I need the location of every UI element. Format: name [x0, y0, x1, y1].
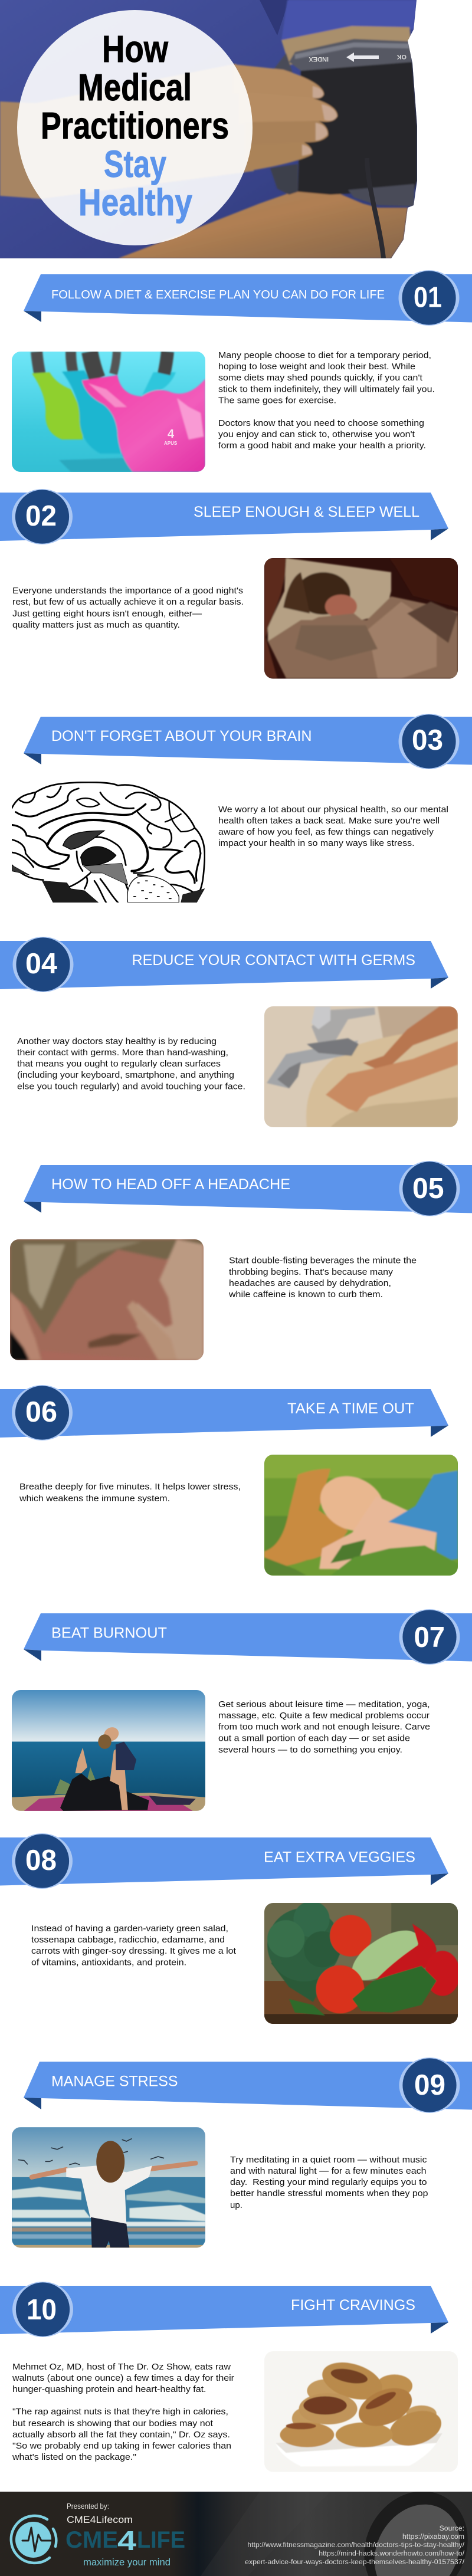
banner 10: [0, 2282, 448, 2337]
text: tip 9: and with natural light — for a few minutes each: [230, 2167, 426, 2176]
text: tip 8: carrots with ginger-soy dressing. It gives me a lot: [31, 1947, 236, 1956]
text: tip 6: Breathe deeply for five minutes. It helps lower stress,: [19, 1482, 241, 1492]
text: tip 5: Start double-fisting beverages the minute the: [229, 1256, 417, 1266]
text: tip 9: day. Resting your mind regularly equips you to: [230, 2178, 427, 2187]
banner 01: [24, 270, 472, 326]
text: tip 2: quality matters just as much as quantity.: [12, 621, 180, 630]
text: tip 9: Try meditating in a quiet room — without music: [230, 2155, 427, 2165]
banner 04: 04: [25, 948, 57, 980]
text: tip 10: Mehmet Oz, MD, host of The Dr. Oz Show, eats raw: [12, 2362, 231, 2372]
presenter name: CME4Lifecom: [67, 2514, 133, 2525]
title text: [41, 28, 229, 224]
hero photo: blood pressure cuff: [0, 0, 419, 260]
text: tip 10: [12, 2362, 234, 2462]
banner 06: TAKE A TIME OUT: [287, 1400, 414, 1417]
sources: [245, 2524, 465, 2566]
text: tip 6: [19, 1482, 241, 1504]
text: tip 3: aware of how you feel, as few things can negatively: [218, 828, 434, 837]
text: tip 2: [12, 586, 244, 630]
illustration: brain: [12, 782, 205, 903]
photo: pecans on plate: [264, 2351, 458, 2472]
text: tip 2: Just getting eight hours isn't enough, either—: [12, 609, 202, 619]
logo wordmark: LIFE: [137, 2527, 185, 2553]
text: tip 6: which weakens the immune system.: [19, 1494, 170, 1504]
text: tip 7: massage, etc. Quite a few medical problems occur: [218, 1711, 430, 1721]
text: tip 1: form a good habit and make your health a priority.: [218, 441, 426, 451]
text: tip 4: Another way doctors stay healthy is by reducing: [17, 1037, 217, 1046]
title circle: [17, 10, 253, 245]
text: tip 5: headaches are caused by dehydration,: [229, 1279, 391, 1288]
hero photo: blood pressure cuff: INDEX: [309, 55, 329, 63]
text: tip 8: of vitamins, antioxidants, and protein.: [31, 1958, 186, 1968]
text: tip 10: "The rap against nuts is that they're high in calories,: [12, 2407, 228, 2417]
logo wordmark: [65, 2525, 185, 2556]
sources: expert-advice-four-ways-doctors-keep-themselves-healthy-0157537/: [245, 2558, 465, 2566]
text: tip 1: Many people choose to diet for a temporary period,: [218, 351, 431, 360]
text: tip 3: impact your health in so many ways like stress.: [218, 839, 414, 848]
text: tip 10: hunger-quashing protein and heart-healthy fat.: [12, 2385, 206, 2394]
text: tip 7: [218, 1700, 430, 1755]
text: tip 1: stick to them indefinitely, they will ultimately fail you.: [218, 385, 435, 394]
banner 10: 10: [27, 2294, 57, 2326]
text: tip 9: up.: [230, 2201, 242, 2210]
photo: kettlebells: [12, 352, 205, 472]
banner 06: [0, 1385, 448, 1440]
banner 01: 01: [414, 282, 442, 314]
text: tip 10: but research is showing that our bodies may not: [12, 2419, 213, 2429]
presented by: Presented by:: [67, 2502, 109, 2511]
text: tip 7: several hours — to do something you enjoy.: [218, 1745, 402, 1755]
banner 08: 08: [25, 1845, 57, 1876]
banner 10: FIGHT CRAVINGS: [291, 2297, 415, 2314]
banner 02: 02: [25, 500, 57, 532]
banner 07: BEAT BURNOUT: [51, 1625, 167, 1641]
sources: http://www.fitnessmagazine.com/health/doctors-tips-to-stay-healthy/: [247, 2541, 465, 2549]
logo wordmark: 4: [117, 2525, 137, 2556]
text: tip 10: what's listed on the package.": [12, 2453, 136, 2462]
banner 03: DON'T FORGET ABOUT YOUR BRAIN: [51, 728, 312, 744]
photo: kettlebells: 4: [168, 428, 175, 441]
banner 07: 07: [414, 1622, 445, 1653]
text: tip 4: [17, 1037, 245, 1091]
text: tip 5: throbbing begins. That's because many: [229, 1268, 394, 1277]
logo wordmark: CME: [65, 2527, 118, 2553]
text: tip 8: Instead of having a garden-variety green salad,: [31, 1924, 228, 1934]
banner 02: SLEEP ENOUGH & SLEEP WELL: [194, 504, 419, 520]
text: tip 1: Doctors know that you need to choose something: [218, 419, 424, 428]
banner 03: 03: [412, 724, 443, 756]
text: tip 4: (including your keyboard, smartphone, and anything: [17, 1071, 234, 1080]
text: tip 8: [31, 1924, 236, 1968]
photo: woman on beach: [12, 2127, 205, 2248]
text: tip 10: walnuts (about one ounce) a few times a day for their: [12, 2374, 234, 2383]
sources: https://pixabay.com: [402, 2532, 464, 2541]
photo: yoga by the sea: [12, 1690, 205, 1811]
sources: Source:: [440, 2524, 464, 2532]
title text: Practitioners: [41, 104, 229, 147]
title text: Medical: [78, 66, 192, 109]
footer: [0, 2492, 472, 2576]
text: tip 7: Get serious about leisure time — meditation, yoga,: [218, 1700, 430, 1709]
text: tip 10: "So we probably end up taking in fewer calories than: [12, 2442, 231, 2451]
text: tip 1: [218, 351, 435, 451]
text: tip 2: Everyone understands the importance of a good night's: [12, 586, 243, 596]
banner 08: [0, 1833, 448, 1889]
text: tip 1: you enjoy and can stick to, otherwise you won't: [218, 430, 415, 439]
sources: https://mind-hacks.wonderhowto.com/how-to/: [319, 2549, 465, 2558]
banner 04: REDUCE YOUR CONTACT WITH GERMS: [132, 952, 415, 969]
banner 09: 09: [414, 2069, 445, 2101]
footer photo: stethoscope: [201, 2492, 467, 2576]
text: tip 3: [218, 805, 448, 848]
text: tip 3: health often takes a back seat. Make sure you're well: [218, 816, 440, 826]
text: tip 1: some diets may shed pounds quickly, if you can't: [218, 373, 422, 383]
banner 02: [0, 489, 448, 544]
text: tip 3: We worry a lot about our physical health, so our mental: [218, 805, 448, 815]
text: tip 4: that means you ought to regularly clean surfaces: [17, 1059, 221, 1069]
banner 04: [0, 937, 448, 992]
banner 05: 05: [412, 1173, 444, 1205]
logo icon: [11, 2516, 56, 2563]
hero photo: blood pressure cuff: OK: [396, 53, 407, 60]
banner 03: [24, 714, 472, 769]
title text: How: [102, 28, 168, 70]
text: tip 7: from too much work and not enough leisure. Carve: [218, 1722, 430, 1732]
text: tip 10: actually absorb all the fat they contain," Dr. Oz says.: [12, 2430, 230, 2440]
text: tip 2: rest, but few of us actually achieve it on a regular basis.: [12, 598, 244, 607]
text: tip 1: hoping to lose weight and look their best. While: [218, 362, 415, 372]
tagline: maximize your mind: [83, 2557, 171, 2568]
text: tip 5: [228, 1256, 417, 1300]
banner 08: EAT EXTRA VEGGIES: [264, 1849, 415, 1865]
photo: woman lying in grass: [264, 1455, 458, 1576]
photo: vegetables: [264, 1901, 460, 2024]
banner 01: FOLLOW A DIET & EXERCISE PLAN YOU CAN DO FOR LIFE: [51, 288, 385, 301]
text: tip 8: tossenapa cabbage, radicchio, edamame, and: [31, 1935, 225, 1945]
photo: washing hands: [264, 1006, 458, 1127]
banner 07: [24, 1609, 472, 1665]
photo: man with headache: [10, 1239, 204, 1360]
photo: girl sleeping: [264, 558, 458, 679]
text: tip 4: their contact with germs. More than hand-washing,: [17, 1048, 228, 1058]
text: tip 9: [230, 2155, 428, 2210]
banner 05: HOW TO HEAD OFF A HEADACHE: [51, 1176, 290, 1193]
banner 05: [24, 1161, 472, 1216]
text: tip 5: while caffeine is known to curb them.: [228, 1290, 383, 1300]
title text: Healthy: [78, 181, 192, 224]
title text: Stay: [104, 143, 166, 185]
text: tip 4: else you touch regularly) and avoid touching your face.: [17, 1082, 245, 1091]
text: tip 1: The same goes for exercise.: [218, 396, 336, 406]
banner 06: 06: [25, 1396, 57, 1428]
photo: kettlebells: APUS: [164, 441, 178, 446]
banner 09: [24, 2057, 472, 2113]
text: tip 7: out a small portion of each day — or set aside: [218, 1734, 410, 1744]
banner 09: MANAGE STRESS: [51, 2073, 178, 2089]
text: tip 9: better handle stressful moments when they pop: [230, 2189, 428, 2198]
